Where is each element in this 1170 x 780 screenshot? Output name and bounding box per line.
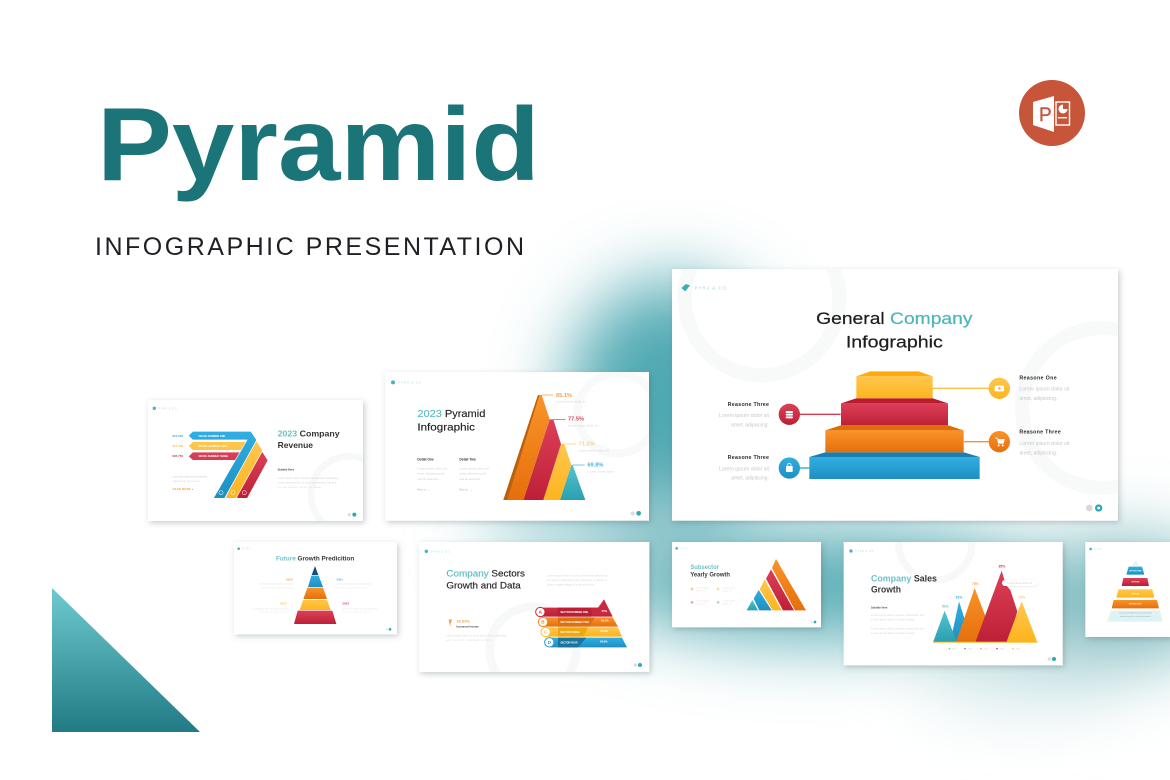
descriptions: Lorem ipsum dolor <box>342 611 371 614</box>
subtitle: INFOGRAPHIC PRESENTATION <box>95 233 524 261</box>
icon: database <box>779 404 800 425</box>
stat: 16.33%: 16.33% <box>456 618 470 623</box>
text block: Subtitle Here <box>871 605 888 609</box>
label: Reasone One <box>1019 375 1070 402</box>
descriptions: Lorem ipsum dolor sit amet consectetur <box>259 583 294 586</box>
stat: 16.33%: elit sed do eiusmod tempor <box>446 639 492 642</box>
label 71.2% <box>564 442 609 452</box>
legend: 2023 <box>952 648 957 650</box>
pagination dots <box>1048 657 1056 661</box>
detail one: Detail One <box>417 458 434 462</box>
label 69.8%: 69.8% <box>587 462 603 468</box>
label: Reasone Three left upper <box>719 402 770 428</box>
connector lines <box>799 388 990 468</box>
years: 2022 <box>280 601 287 605</box>
label: Reasone Three left lower: Reasone Three <box>728 455 769 461</box>
descriptions: Lorem ipsum dolor sit amet consectetur <box>342 607 378 610</box>
bar labels: SECTOR NUMBER TWO <box>560 620 589 624</box>
years: 2023 <box>342 601 349 605</box>
arrow labels <box>199 434 228 458</box>
label: Reasone One: Lorem ipsum dolor sit <box>1019 387 1070 393</box>
panel: Subsector Yearly Growth slide: Yearly Growth <box>690 573 730 579</box>
label: Reasone Three left upper: amet, adipiscing. <box>731 422 769 428</box>
subtitle text: Lorem ipsum dolor sit amet consectetur adipiscing <box>278 476 339 480</box>
pagination dots <box>811 621 816 623</box>
pyramid labels: OPTION TWO <box>1129 603 1142 605</box>
pyramid labels <box>1129 570 1142 605</box>
label 85.1% <box>542 393 586 404</box>
text block: Lorem ipsum dolor sit amet consectetur elit <box>871 627 924 630</box>
icon: PowerPoint logo: P <box>1039 105 1052 126</box>
panel: Company Sales Growth slide: Growth <box>871 585 901 595</box>
note text <box>173 475 208 491</box>
label: Reasone Three left lower: amet, adipiscing. <box>731 476 769 482</box>
value labels: $14.500 <box>172 444 183 448</box>
pyramid note: adipiscing elit sed do eiusmod <box>1120 615 1151 618</box>
panel: Company Sales Growth slide <box>842 542 1066 670</box>
panel: Company Sectors Growth and Data slide <box>419 542 649 693</box>
label 85.1%: 85.1% <box>556 393 572 399</box>
logo: PYRA <box>680 547 689 550</box>
text block <box>871 605 924 635</box>
legend: Lorem ipsum <box>723 586 736 589</box>
text block: Lorem ipsum dolor sit amet consectetur elit <box>871 614 924 617</box>
label: Reasone Three left lower: Lorem ipsum dolor sit <box>719 466 770 472</box>
paragraph: dolore magna aliqua ut enim ad minim <box>547 584 594 587</box>
decorative triangle <box>52 588 200 732</box>
value labels <box>172 434 183 458</box>
values: 85% <box>999 565 1005 569</box>
label: Reasone Three left upper: Lorem ipsum dolor sit <box>719 413 770 419</box>
label 71.2%: 71.2% <box>579 442 595 448</box>
legend: dolor sit <box>723 603 732 606</box>
pyramid chart <box>503 395 585 500</box>
paragraph: elit sed do eiusmod tempor incididunt ut labore et <box>547 579 607 582</box>
pagination dots <box>348 513 356 517</box>
label 69.8% <box>573 462 614 473</box>
panel: 2023 Company Revenue slide: Revenue <box>278 440 313 450</box>
panel: 2023 Pyramid Infographic slide <box>385 372 657 521</box>
logo <box>237 547 251 551</box>
detail two: sed do eiusmod. <box>459 477 481 481</box>
paragraph <box>547 575 608 587</box>
panel: General Company Infographic slide <box>672 268 1122 526</box>
panel: 2023 Company Revenue slide <box>147 399 368 526</box>
arrow labels: DETAIL NUMBER THREE <box>199 454 228 458</box>
legend: 2023 <box>1000 648 1005 650</box>
values: 75% <box>972 582 979 586</box>
triangle chart <box>747 559 806 610</box>
circle letters: C <box>544 630 548 635</box>
label 77.5% <box>553 417 598 428</box>
label 77.5%: Lorem ipsum dolor sit <box>568 425 598 428</box>
icon: PowerPoint logo <box>1019 80 1085 146</box>
note text: Lorem ipsum dolor sit amet consectetur <box>173 475 208 478</box>
bar labels <box>560 609 609 644</box>
logo: PYRA & CO. <box>695 286 729 291</box>
callout <box>1002 580 1037 586</box>
mountain chart <box>933 571 1037 643</box>
subtitle text: Subtitle Here <box>278 468 295 472</box>
legend: Lorem ipsum <box>696 600 709 603</box>
pyramid chart <box>536 599 627 647</box>
legend: dolor sit <box>696 603 706 606</box>
detail two: amet, adipiscing elit, <box>459 472 487 476</box>
label: Reasone Three right: amet, adipiscing. <box>1019 450 1057 456</box>
panel: Future Growth Predicition slide <box>234 542 397 634</box>
detail two: Lorem ipsum dolor sit <box>459 466 489 470</box>
pagination dots <box>1086 504 1102 512</box>
label: Reasone Three right <box>1019 429 1070 456</box>
years <box>280 577 349 605</box>
values: 61% <box>956 595 962 599</box>
note text: READ MORE ▸ <box>173 487 194 491</box>
legend: Lorem ipsum <box>696 586 709 589</box>
legend: 2023 <box>1016 648 1021 650</box>
stat: 16.33%: Increased Income <box>456 625 479 629</box>
panel: General Company Infographic slide: Infographic <box>846 332 943 351</box>
detail one: Lorem ipsum dolor sit <box>417 466 447 470</box>
circle letters: A <box>539 610 543 615</box>
logo <box>849 549 875 553</box>
panel: Subsector Yearly Growth slide <box>672 542 821 627</box>
descriptions: Lorem ipsum dolor <box>259 611 288 614</box>
value labels: $35.750 <box>172 454 183 458</box>
bar labels: 55% <box>602 609 608 613</box>
panel: 2023 Pyramid Infographic slide: Infographic <box>417 423 475 434</box>
panel: cropped stacked pyramid slide <box>1085 542 1170 637</box>
pyramid note: Lorem ipsum dolor sit amet consectetur <box>1119 612 1152 615</box>
heading: Company Sectors <box>446 569 526 579</box>
label: Reasone One: Reasone One <box>1019 375 1057 381</box>
pyramid labels: OPTION <box>1132 593 1140 595</box>
years: 2021 <box>336 577 343 581</box>
heading: Company Sales <box>871 573 937 583</box>
stacked pyramid <box>1107 560 1163 622</box>
heading: General Company <box>816 309 973 328</box>
pyramid labels: OPTION <box>1132 582 1140 584</box>
descriptions: Lorem ipsum dolor sit amet consectetur <box>253 607 288 610</box>
icon: money <box>989 378 1010 399</box>
logo: PYRA & CO. <box>159 407 179 410</box>
stat: 16.33%: Lorem ipsum dolor sit amet consectetur adipiscing <box>446 635 507 638</box>
circle letters: D <box>548 640 552 645</box>
bar labels: SECTOR FOUR <box>560 640 578 644</box>
circle letters <box>539 610 552 645</box>
pyramid note <box>1119 612 1152 618</box>
label: Reasone Three right: Reasone Three <box>1019 429 1061 435</box>
values: 51% <box>942 605 949 609</box>
arrow labels: DETAIL NUMBER ONE <box>199 434 226 438</box>
detail two: More → <box>459 488 473 492</box>
heading: Future Growth Predicition <box>276 556 354 563</box>
pagination dots <box>631 511 641 516</box>
legend: 2023 <box>984 648 989 650</box>
legend: 2023 <box>968 648 973 650</box>
logo <box>153 407 179 410</box>
pyramid chart <box>809 371 980 479</box>
paragraph: Lorem ipsum dolor sit amet consectetur adipiscing <box>547 575 608 578</box>
legend <box>948 648 1021 650</box>
logo: PYRA & CO. <box>431 550 451 553</box>
label: Reasone Three right: Lorem ipsum dolor sit <box>1019 441 1070 447</box>
logo <box>681 284 729 291</box>
values: 70% <box>1019 595 1025 599</box>
heading: 2023 Pyramid <box>417 409 486 420</box>
label 85.1%: Lorem ipsum dolor sit <box>556 401 586 404</box>
circle letters: B <box>541 620 545 625</box>
legend <box>691 586 736 606</box>
bar labels: 65.1% <box>601 619 609 623</box>
legend: dolor sit <box>696 589 706 592</box>
years: 2020 <box>286 577 293 581</box>
legend: Lorem ipsum <box>723 600 736 603</box>
logo <box>391 380 424 385</box>
note text: adipiscing elit sed do <box>173 480 200 483</box>
detail one <box>417 458 447 492</box>
heading: Subsector <box>690 565 720 571</box>
pagination dots <box>634 663 642 667</box>
logo: PYRA <box>242 548 251 551</box>
pyramid labels: OPTION ONE <box>1129 570 1142 572</box>
label 69.8%: Lorem ipsum dolor <box>587 470 614 473</box>
text block: Lorem ipsum dolor sit amet tempor <box>871 618 915 621</box>
subtitle text: Lorem ipsum dolor sit amet consectetur elit sed <box>278 480 337 484</box>
title: Pyramid <box>97 87 540 203</box>
pagination dots <box>386 628 391 631</box>
detail one: amet, adipiscing elit, <box>417 472 445 476</box>
logo: PYRA & CO. <box>399 381 424 385</box>
callout: Lorem ipsum dolor sit <box>1007 582 1032 585</box>
label: Reasone One: amet, adipiscing. <box>1019 396 1057 402</box>
stat: 16.33% <box>446 618 507 642</box>
label 71.2%: Lorem ipsum dolor sit <box>579 449 609 452</box>
bar labels: SECTOR NUMBER ONE <box>560 610 589 614</box>
logo: PYRA <box>1094 548 1103 551</box>
logo <box>425 550 451 553</box>
descriptions <box>253 583 378 614</box>
label: Reasone Three left lower <box>719 455 770 482</box>
heading: 2023 Company <box>278 429 340 439</box>
bar labels: SECTOR THREE <box>560 630 580 634</box>
descriptions: Lorem ipsum dolor sit <box>336 586 367 589</box>
text block: Lorem ipsum dolor sit amet tempor <box>871 632 915 635</box>
value labels: $15.500 <box>172 434 183 438</box>
icon: cart <box>989 431 1010 452</box>
arrow chart <box>188 431 268 498</box>
subtitle text: Lorem ipsum dolor sit amet <box>278 485 321 489</box>
label: Reasone Three left upper: Reasone Three <box>728 402 769 408</box>
detail two <box>459 458 489 492</box>
detail one: More → <box>417 488 431 492</box>
bar labels: 75.3% <box>600 629 609 633</box>
arrow labels: DETAIL NUMBER TWO <box>199 444 227 448</box>
bar labels: 84.9% <box>600 639 608 643</box>
descriptions: Lorem ipsum dolor sit amet consectetur <box>336 583 372 586</box>
detail two: Detail Two <box>459 458 476 462</box>
logo <box>675 547 689 550</box>
detail one: sed do eiusmod. <box>417 477 439 481</box>
background teal glow <box>480 280 1170 700</box>
logo: PYRA & CO. <box>855 550 875 553</box>
values <box>942 565 1025 609</box>
pyramid chart <box>294 566 336 624</box>
subtitle text <box>278 468 339 489</box>
icon: bag <box>779 457 800 479</box>
descriptions: Lorem ipsum dolor sit amet <box>261 586 294 589</box>
legend: dolor sit <box>723 589 732 592</box>
label 77.5%: 77.5% <box>568 417 584 423</box>
panel: Company Sectors Growth and Data slide: Growth and Data <box>446 581 521 591</box>
